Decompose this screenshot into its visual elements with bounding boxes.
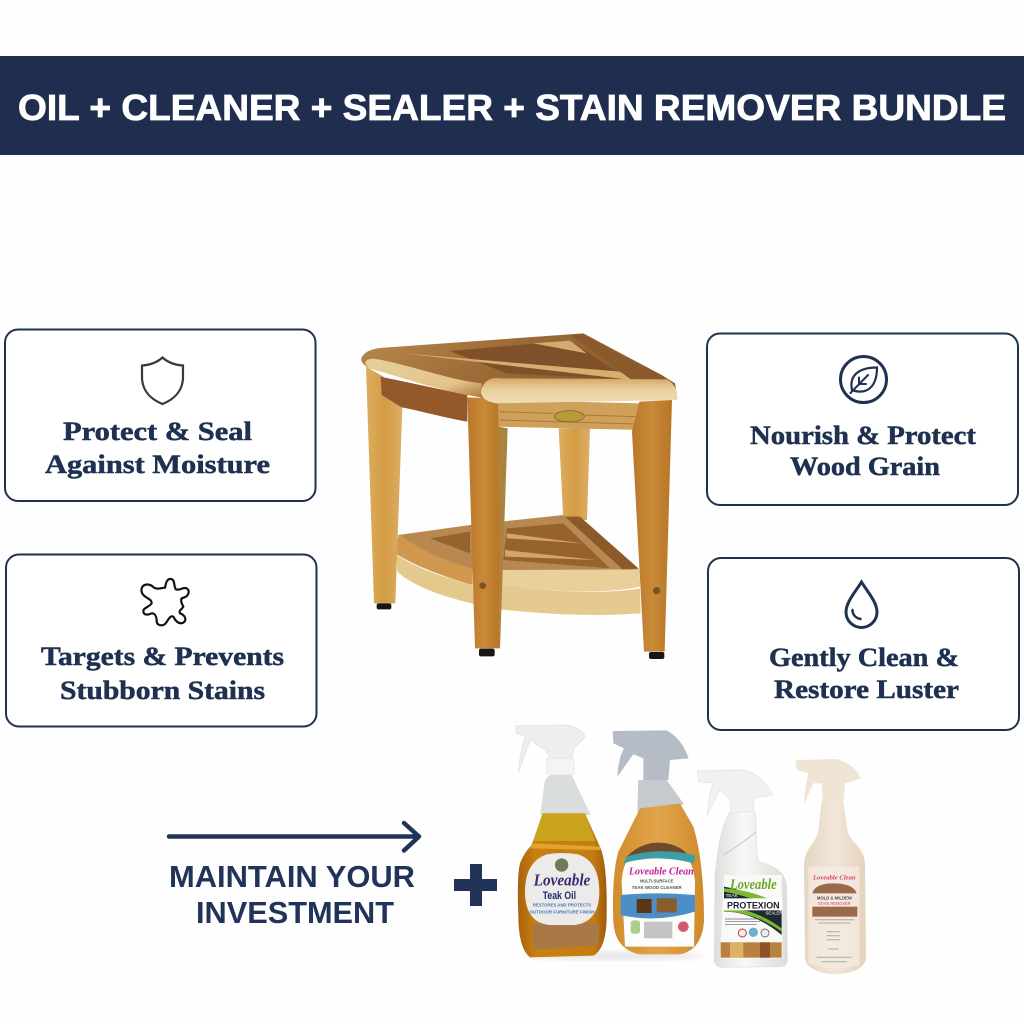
rubber feet <box>377 603 664 659</box>
bottle: cleaner: Loveable Clean <box>628 866 694 877</box>
bottle: cleaner: TEAK WOOD CLEANER <box>632 885 682 891</box>
teak corner stool <box>361 333 677 659</box>
text: targets stains: Stubborn Stains <box>60 676 265 705</box>
left apron <box>381 377 467 422</box>
seat top <box>361 333 677 403</box>
bottle: sealer: SEALER <box>765 910 783 915</box>
panel: gently clean <box>708 558 1019 730</box>
lower shelf <box>394 515 641 615</box>
icon: leaf in circle <box>840 356 886 402</box>
icon: shield <box>142 358 183 404</box>
text: targets stains: Targets & Prevents <box>41 642 284 671</box>
bottle: teak oil: Teak Oil <box>543 890 576 902</box>
brass badge <box>554 411 584 422</box>
bottle: teak oil: OUTDOOR FURNITURE FINISH <box>529 910 595 916</box>
bottle: stain remover <box>796 759 866 974</box>
right leg <box>632 400 672 652</box>
text: protect and seal: Protect & Seal <box>63 417 252 446</box>
shadow <box>523 951 703 960</box>
arrow <box>169 823 419 850</box>
text: nourish: Nourish & Protect <box>750 421 976 450</box>
panel: targets stains <box>6 554 316 726</box>
callout: maintain your investment <box>169 823 419 930</box>
bottle: stain remover: STAIN REMOVER <box>818 901 851 906</box>
panel: protect and seal <box>5 330 316 501</box>
icon: water drop <box>846 582 877 628</box>
text: maintain: INVESTMENT <box>196 895 394 930</box>
right apron <box>498 400 639 430</box>
front leg <box>467 397 500 648</box>
text: gently clean: Restore Luster <box>774 675 959 704</box>
bottle: sealer: Loveable <box>729 877 777 893</box>
bottle: stain remover: MOLD & MILDEW <box>817 895 853 900</box>
apron grain <box>500 412 638 424</box>
bottle: sealer: TEAK <box>726 893 739 898</box>
title banner <box>0 56 1024 155</box>
bottle: teak oil: RESTORES AND PROTECTS <box>533 903 592 909</box>
text: gently clean: Gently Clean & <box>769 643 959 672</box>
text: nourish: Wood Grain <box>790 452 941 481</box>
plus sign <box>454 864 497 906</box>
leg pegs <box>479 582 660 594</box>
product bottles <box>516 725 866 974</box>
bottle: sealer <box>697 770 787 967</box>
text: maintain: MAINTAIN YOUR <box>169 859 415 894</box>
front leg side <box>498 427 508 648</box>
icon: splatter <box>141 579 189 625</box>
left leg <box>366 367 402 603</box>
bottle: sealer: PROTEXION <box>727 900 780 910</box>
text: protect and seal: Against Moisture <box>45 450 270 479</box>
panel: nourish <box>707 334 1018 505</box>
bottle: stain remover: Loveable Clean <box>812 874 856 881</box>
title banner: OIL + CLEANER + SEALER + STAIN REMOVER BUNDLE <box>18 87 1006 128</box>
bottle: cleaner: MULTI-SURFACE <box>640 878 674 884</box>
back leg <box>559 428 590 520</box>
bottle: teak oil <box>516 725 607 957</box>
bottle: teak oil: Loveable <box>533 871 591 890</box>
bottle: cleaner <box>613 730 704 954</box>
